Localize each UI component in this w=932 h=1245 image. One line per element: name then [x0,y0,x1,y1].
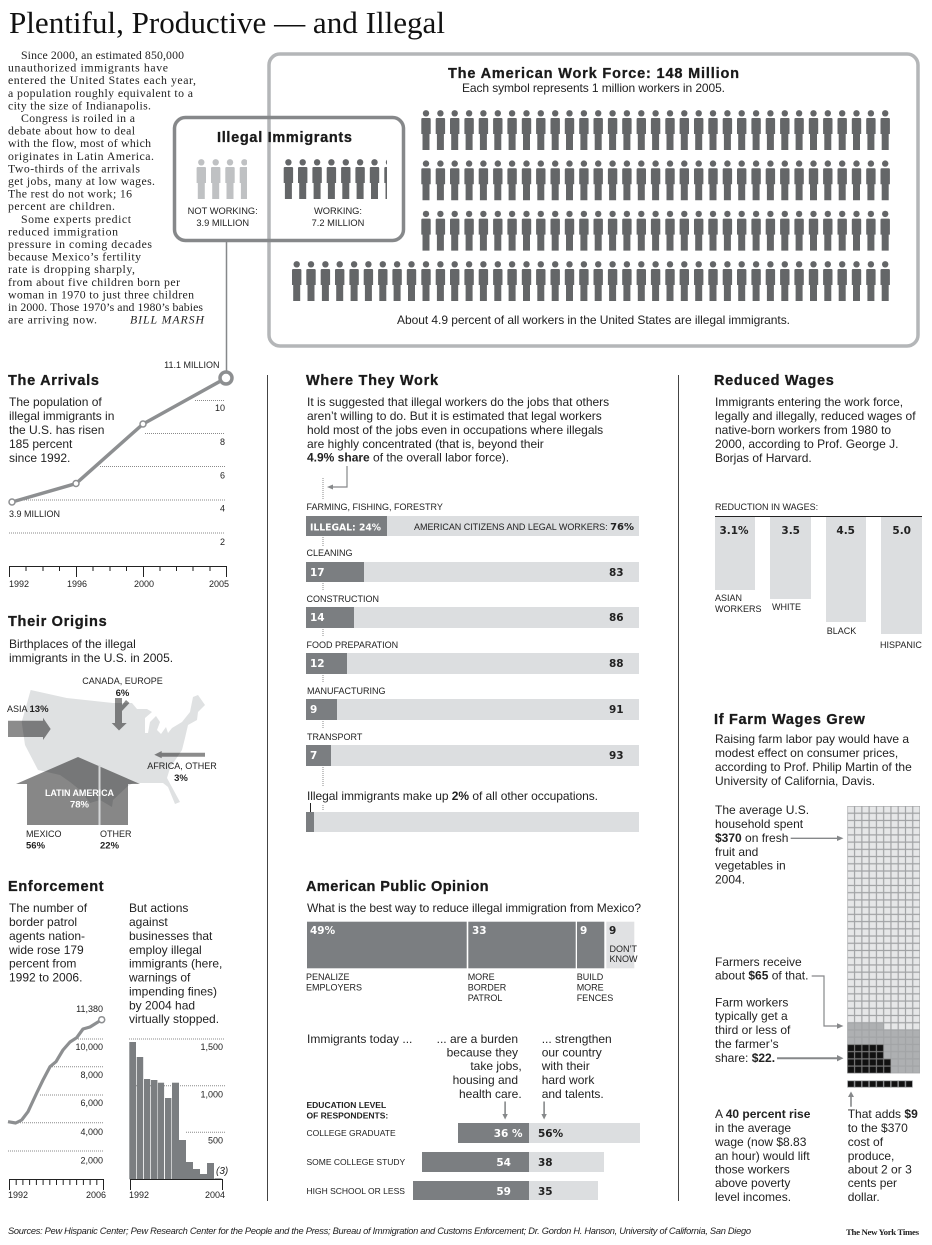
reduced wages text: 2000, according to Prof. George J. [715,437,898,451]
grid: added $9 [847,1080,913,1088]
adds $9 text: cents per [848,1176,897,1190]
arrivals x axis: 1992 [9,579,29,589]
credit: The New York Times [846,1227,920,1237]
actions text: by 2004 had [129,998,195,1012]
bar: food preparation [306,640,639,674]
origins text: immigrants in the U.S. in 2005. [9,651,173,665]
adds $9 text: cost of [848,1135,884,1149]
$370 text: fruit and [715,845,758,859]
border patrol text: The number of [9,901,88,915]
dotted reference line [322,478,324,811]
11.1 million label: 11.1 MILLION [164,360,220,370]
burden text [437,1032,522,1101]
arrow: $370 [791,836,844,841]
illegal immigrants heading: Illegal Immigrants [217,130,352,146]
wage bar labels: WHITE [772,602,801,612]
border patrol x axis: 1992 [8,1190,28,1200]
actions text: employ illegal [129,943,202,957]
Mexico value: 56% [26,840,46,852]
actions text: But actions [129,901,188,915]
bar: farming: AMERICAN CITIZENS AND LEGAL WORKERS: 76% [414,522,634,533]
adds $9 text: That adds $9 [848,1107,918,1121]
education heading [306,1100,388,1120]
border patrol y labels: 6,000 [80,1098,103,1108]
border patrol text [8,901,88,984]
arrow: Latin America [16,757,140,825]
where they work text: aren’t willing to do. But it is estimated that legal workers [307,409,602,423]
bar: food preparation: FOOD PREPARATION [306,640,398,650]
farm wages text [715,732,912,788]
work force note: About 4.9 percent of all workers in the United States are illegal immigrants. [397,313,790,327]
warnings y labels: 1,500 [200,1042,223,1052]
farm workers text [715,996,791,1065]
intro text: pressure in coming decades [8,237,152,251]
stacked bar: best way: 9 [580,925,587,937]
map of United States [22,690,205,807]
reduction in wages label: REDUCTION IN WAGES: [715,502,818,512]
row: high school or less: 35 [538,1186,553,1198]
bar: construction: CONSTRUCTION [306,594,379,604]
40 percent text: those workers [715,1162,790,1176]
arrivals y axis labels: 8 [220,437,225,447]
bar: construction [306,594,639,628]
warnings x axis [129,1180,225,1200]
strengthen text: and talents. [542,1087,604,1101]
arrow: burden [502,1102,508,1120]
farm wages text: Raising farm labor pay would have a [715,732,909,746]
3.9 million label: 3.9 MILLION [9,509,60,519]
row: high school or less: 59 [496,1186,511,1198]
adds $9 text [848,1107,918,1204]
not working label: NOT WORKING: [188,206,258,216]
adds $9 text: dollar. [848,1190,880,1204]
row: college graduate: 36 % [494,1128,523,1140]
arrivals y axis labels: 10 [215,403,225,413]
border patrol y labels: 4,000 [80,1127,103,1137]
strengthen text: our country [542,1046,602,1060]
bar: food preparation: 88 [609,658,624,670]
reduced wages text: native-born workers from 1980 to [715,423,891,437]
pictogram rows [292,110,890,301]
$370 text: household spent [715,817,804,831]
arrivals x axis: 1996 [67,579,87,589]
wage bars [715,516,922,634]
work force heading: The American Work Force: 148 Million [448,66,739,82]
intro text [8,48,205,327]
panel: the arrivals [8,241,232,589]
intro text: woman in 1970 to just three children [8,287,194,301]
row: some college study: 38 [538,1157,553,1169]
bar: other occupations: Illegal immigrants make up 2% of all other occupations. [307,789,598,803]
adds $9 text: about 2 or 3 [848,1162,912,1176]
actions text: warnings of [128,970,191,984]
row: some college study: SOME COLLEGE STUDY [306,1157,406,1167]
bar: manufacturing: MANUFACTURING [307,686,386,696]
panel: American work force [269,54,918,346]
bar: transport [306,732,639,766]
stacked bar: best way: 9 [609,925,616,937]
border patrol line chart [8,1017,105,1123]
warnings x axis: 1992 [129,1190,149,1200]
farmers text: Farmers receive [715,955,802,969]
bar: construction: 14 [310,612,325,624]
enforcement heading: Enforcement [8,879,104,895]
reduced wages text: Borjas of Harvard. [715,451,812,465]
warnings x axis: 2004 [205,1190,225,1200]
bar: manufacturing [306,686,639,720]
Africa, other label: AFRICA, OTHER [147,761,217,771]
40 percent text: wage (now $8.83 [714,1135,807,1149]
strengthen text: with their [541,1059,590,1073]
immigrants today label: Immigrants today ... [307,1032,412,1046]
strengthen text [541,1032,612,1101]
40 percent text: in the average [715,1121,791,1135]
row: college graduate: 56% [538,1128,564,1140]
Canada, Europe label: CANADA, EUROPE [82,676,163,686]
arrivals y axis labels [215,403,225,547]
border patrol text: percent from [9,956,76,970]
reduced wages heading: Reduced Wages [714,373,835,389]
intro text: BILL MARSH [130,313,205,327]
bar: transport: TRANSPORT [307,732,363,742]
wage bar labels: HISPANIC [880,640,922,650]
farm wages heading: If Farm Wages Grew [714,712,865,728]
burden text: ... are a burden [437,1032,518,1046]
pictogram: working [284,159,394,199]
bar: farming: FARMING, FISHING, FORESTRY [306,502,443,512]
Asia label: ASIA 13% [7,704,49,715]
border patrol text: border patrol [9,915,77,929]
bar labels: MORE [577,983,604,993]
origins text: Birthplaces of the illegal [9,637,136,651]
farm wages text: modest effect on consumer prices, [715,746,898,760]
arrivals line chart [9,372,232,505]
stacked bar: best way [307,922,638,968]
arrow: Asia [8,718,51,740]
arrivals heading: The Arrivals [8,373,100,389]
arrivals y axis labels: 4 [220,504,225,514]
bar labels: MORE [468,972,495,982]
stacked bar: best way: DON’T [610,944,637,954]
education heading: OF RESPONDENTS: [306,1110,388,1120]
leader line [226,241,228,372]
actions text: against [129,915,168,929]
farmers text: about $65 of that. [715,968,808,982]
border patrol y labels: 11,380 [76,1004,103,1014]
panel: reduced wages [714,373,922,650]
intro text: reduced immigration [8,224,118,238]
wage bar labels: ASIAN [715,593,742,603]
bar: manufacturing: 91 [609,704,624,716]
work force subtitle: Each symbol represents 1 million workers in 2005. [462,81,725,95]
farm workers text: Farm workers [715,996,788,1010]
public opinion heading: American Public Opinion [306,879,488,895]
panel: where they work [306,373,639,832]
Mexico label: MEXICO [26,829,62,839]
border patrol text: wide rose 179 [8,943,84,957]
where they work text: 4.9% share of the overall labor force). [307,450,509,464]
grid: $370 of produce [847,806,920,1073]
farm workers text: share: $22. [715,1051,775,1065]
intro text: Congress is roiled in a [21,111,136,125]
bar: farming [306,502,639,536]
bar labels: PENALIZE [306,972,350,982]
reduced wages text: Immigrants entering the work force, [715,395,903,409]
border patrol y labels: 2,000 [80,1156,103,1166]
40 percent text: above poverty [715,1176,790,1190]
pictogram: not working [197,159,249,199]
warnings y labels: 500 [208,1136,223,1146]
education heading: EDUCATION LEVEL [306,1100,386,1110]
row: high school or less [306,1181,598,1200]
row: some college study: 54 [496,1157,511,1169]
actions text: businesses that [129,929,213,943]
bar labels: FENCES [577,993,613,1003]
working value: 7.2 MILLION [312,218,364,228]
origins heading: Their Origins [8,614,107,630]
working label: WORKING: [314,206,362,216]
adds $9 text: produce, [848,1149,894,1163]
bar: cleaning: CLEANING [306,548,353,558]
actions text [128,901,222,1026]
panel: American public opinion [306,879,641,1200]
arrow: 4.9% share [327,466,347,490]
farm workers text: the farmer’s [715,1037,779,1051]
sources: Sources: Pew Hispanic Center; Pew Research Center for the People and the Press; Bureau of Immigration and Customs Enforcement; Dr. Gordon H. Hanson, University of California, San Diego [8,1226,751,1236]
reduced wages text: legally and illegally, reduced wages of [715,409,916,423]
burden text: housing and [453,1073,518,1087]
bar labels [306,972,613,1003]
warnings bar chart [129,1042,222,1179]
$370 text: vegetables in [715,858,786,872]
column dividers [268,375,678,1201]
border patrol y labels: 10,000 [75,1042,103,1052]
origins text [9,637,173,665]
farm wages text: University of California, Davis. [715,774,875,788]
arrivals x axis: 2000 [134,579,154,589]
bar: cleaning: 83 [609,567,624,579]
where they work text [307,395,609,464]
Canada, Europe value: 6% [116,688,130,699]
wage bars: 5.0 [892,525,911,537]
$370 text: 2004. [715,872,745,886]
arrow: Canada, Europe [112,698,130,730]
bar: transport: 7 [310,750,317,762]
where they work text: hold most of the jobs even in occupations where illegals [307,423,603,437]
warnings y labels: 1,000 [200,1090,223,1100]
other label: OTHER [100,829,132,839]
arrivals gridlines [9,400,225,533]
strengthen text: ... strengthen [542,1032,612,1046]
wage bar labels [715,593,922,650]
$370 text [715,803,809,886]
farm workers text: typically get a [715,1009,788,1023]
value callout (3): (3) [216,1166,228,1177]
wage bars: 3.5 [781,525,800,537]
arrivals text: since 1992. [9,451,70,465]
actions text: immigrants (here, [129,956,222,970]
40 percent text [714,1107,811,1204]
border patrol x axis [8,1180,106,1200]
intro text: rate is dropping sharply, [8,262,135,276]
bar: farming: ILLEGAL: 24% [310,522,381,534]
intro text: are arriving now. [8,313,97,327]
bar labels: PATROL [468,993,502,1003]
where they work text: It is suggested that illegal workers do the jobs that others [307,395,609,409]
arrivals text: the U.S. has risen [9,423,104,437]
arrow: farmers [812,976,844,1029]
intro text: debate about how to deal [8,124,136,138]
arrivals text: illegal immigrants in [9,409,114,423]
$370 text: The average U.S. [715,803,809,817]
panel: if farm wages grew [714,712,920,1204]
panel: enforcement [8,879,228,1200]
intro text: Some experts predict [21,212,132,226]
bar: other occupations [306,789,639,832]
row: college graduate [306,1123,640,1143]
where they work heading: Where They Work [306,373,439,389]
intro text: in 2000. Those 1970’s and 1980’s babies [8,300,203,314]
arrow: added $9 [848,1092,854,1107]
arrow: Africa, other [154,751,205,758]
40 percent text: level incomes. [715,1190,791,1204]
grid: workers' $22 [847,1044,891,1073]
warnings y labels [200,1042,223,1146]
farm wages text: according to Prof. Philip Martin of the [715,760,912,774]
border patrol y labels [75,1004,103,1166]
title: Plentiful, Productive — and Illegal [9,5,445,40]
arrow: strengthen [541,1102,547,1120]
intro text: get jobs, many at low wages. [8,174,155,188]
intro text: with the flow, most of which [8,136,151,150]
stacked bar: best way: 49% [310,925,336,937]
row: college graduate: COLLEGE GRADUATE [306,1128,396,1138]
arrivals text: The population of [9,395,102,409]
intro text: from about five children born per [8,275,180,289]
border patrol text: 1992 to 2006. [9,970,82,984]
bar: construction: 86 [609,612,624,624]
intro text: city the size of Indianapolis. [8,98,151,112]
other value: 22% [100,840,120,852]
arrivals x axis [9,566,229,589]
burden text: health care. [459,1087,522,1101]
border patrol text: agents nation- [9,929,85,943]
intro text: because Mexico’s fertility [8,250,141,264]
intro text: The rest do not work; 16 [8,187,132,201]
adds $9 text: to the $370 [848,1121,908,1135]
stacked bar: best way: KNOW [610,954,638,964]
wage bar labels: BLACK [827,626,856,636]
bar: cleaning [306,548,639,582]
border patrol y labels: 8,000 [80,1070,103,1080]
arrivals text: 185 percent [9,437,73,451]
Latin America value: 78% [70,800,90,810]
farm workers text: third or less of [715,1023,791,1037]
intro text: Two-thirds of the arrivals [8,161,140,175]
row: high school or less: HIGH SCHOOL OR LESS [306,1186,405,1196]
40 percent text: an hour) would lift [715,1149,810,1163]
burden text: take jobs, [470,1059,522,1073]
Latin America label: LATIN AMERICA [45,788,114,798]
border patrol gridlines [8,1039,103,1151]
arrivals y axis labels: 6 [220,470,225,480]
arrivals x axis: 2005 [209,579,229,589]
question: What is the best way to reduce illegal immigration from Mexico? [307,901,641,915]
panel: their origins [7,614,217,852]
wage bar labels: WORKERS [715,604,762,614]
wage bars: 4.5 [836,525,855,537]
40 percent text: A 40 percent rise [715,1107,811,1121]
grid: farmers' $65 [847,1023,920,1073]
intro text: entered the United States each year, [8,73,196,87]
intro text: originates in Latin America. [8,149,154,163]
bar labels: BUILD [577,972,604,982]
burden text: because they [447,1046,518,1060]
not working value: 3.9 MILLION [196,218,249,228]
arrivals y axis labels: 2 [220,537,225,547]
panel: illegal immigrants [174,118,404,240]
warnings gridlines [129,1039,225,1132]
intro text: a population roughly equivalent to a [8,86,194,100]
actions text: virtually stopped. [129,1012,219,1026]
arrivals text [9,395,114,465]
border patrol x axis: 2006 [86,1190,106,1200]
bar labels: BORDER [468,983,507,993]
farmers text [715,955,808,982]
wage bars: 3.1% [719,525,749,537]
bar labels: EMPLOYERS [306,983,362,993]
row: some college study [306,1152,604,1172]
intro text: unauthorized immigrants have [8,61,168,75]
where they work text: are highly concentrated (that is, beyond their [307,437,544,451]
$370 text: $370 on fresh [715,831,788,845]
strengthen text: hard work [542,1073,595,1087]
intro text: percent are children. [8,199,115,213]
Africa, other value: 3% [174,773,188,784]
reduced wages text [715,395,916,465]
arrow: farm workers [777,1055,844,1061]
stacked bar: best way: 33 [472,925,487,937]
bar: food preparation: 12 [310,658,325,670]
bar: transport: 93 [609,750,624,762]
actions text: impending fines) [129,984,217,998]
bar: cleaning: 17 [310,567,325,579]
intro text: Since 2000, an estimated 850,000 [21,48,184,62]
bar: manufacturing: 9 [310,704,317,716]
